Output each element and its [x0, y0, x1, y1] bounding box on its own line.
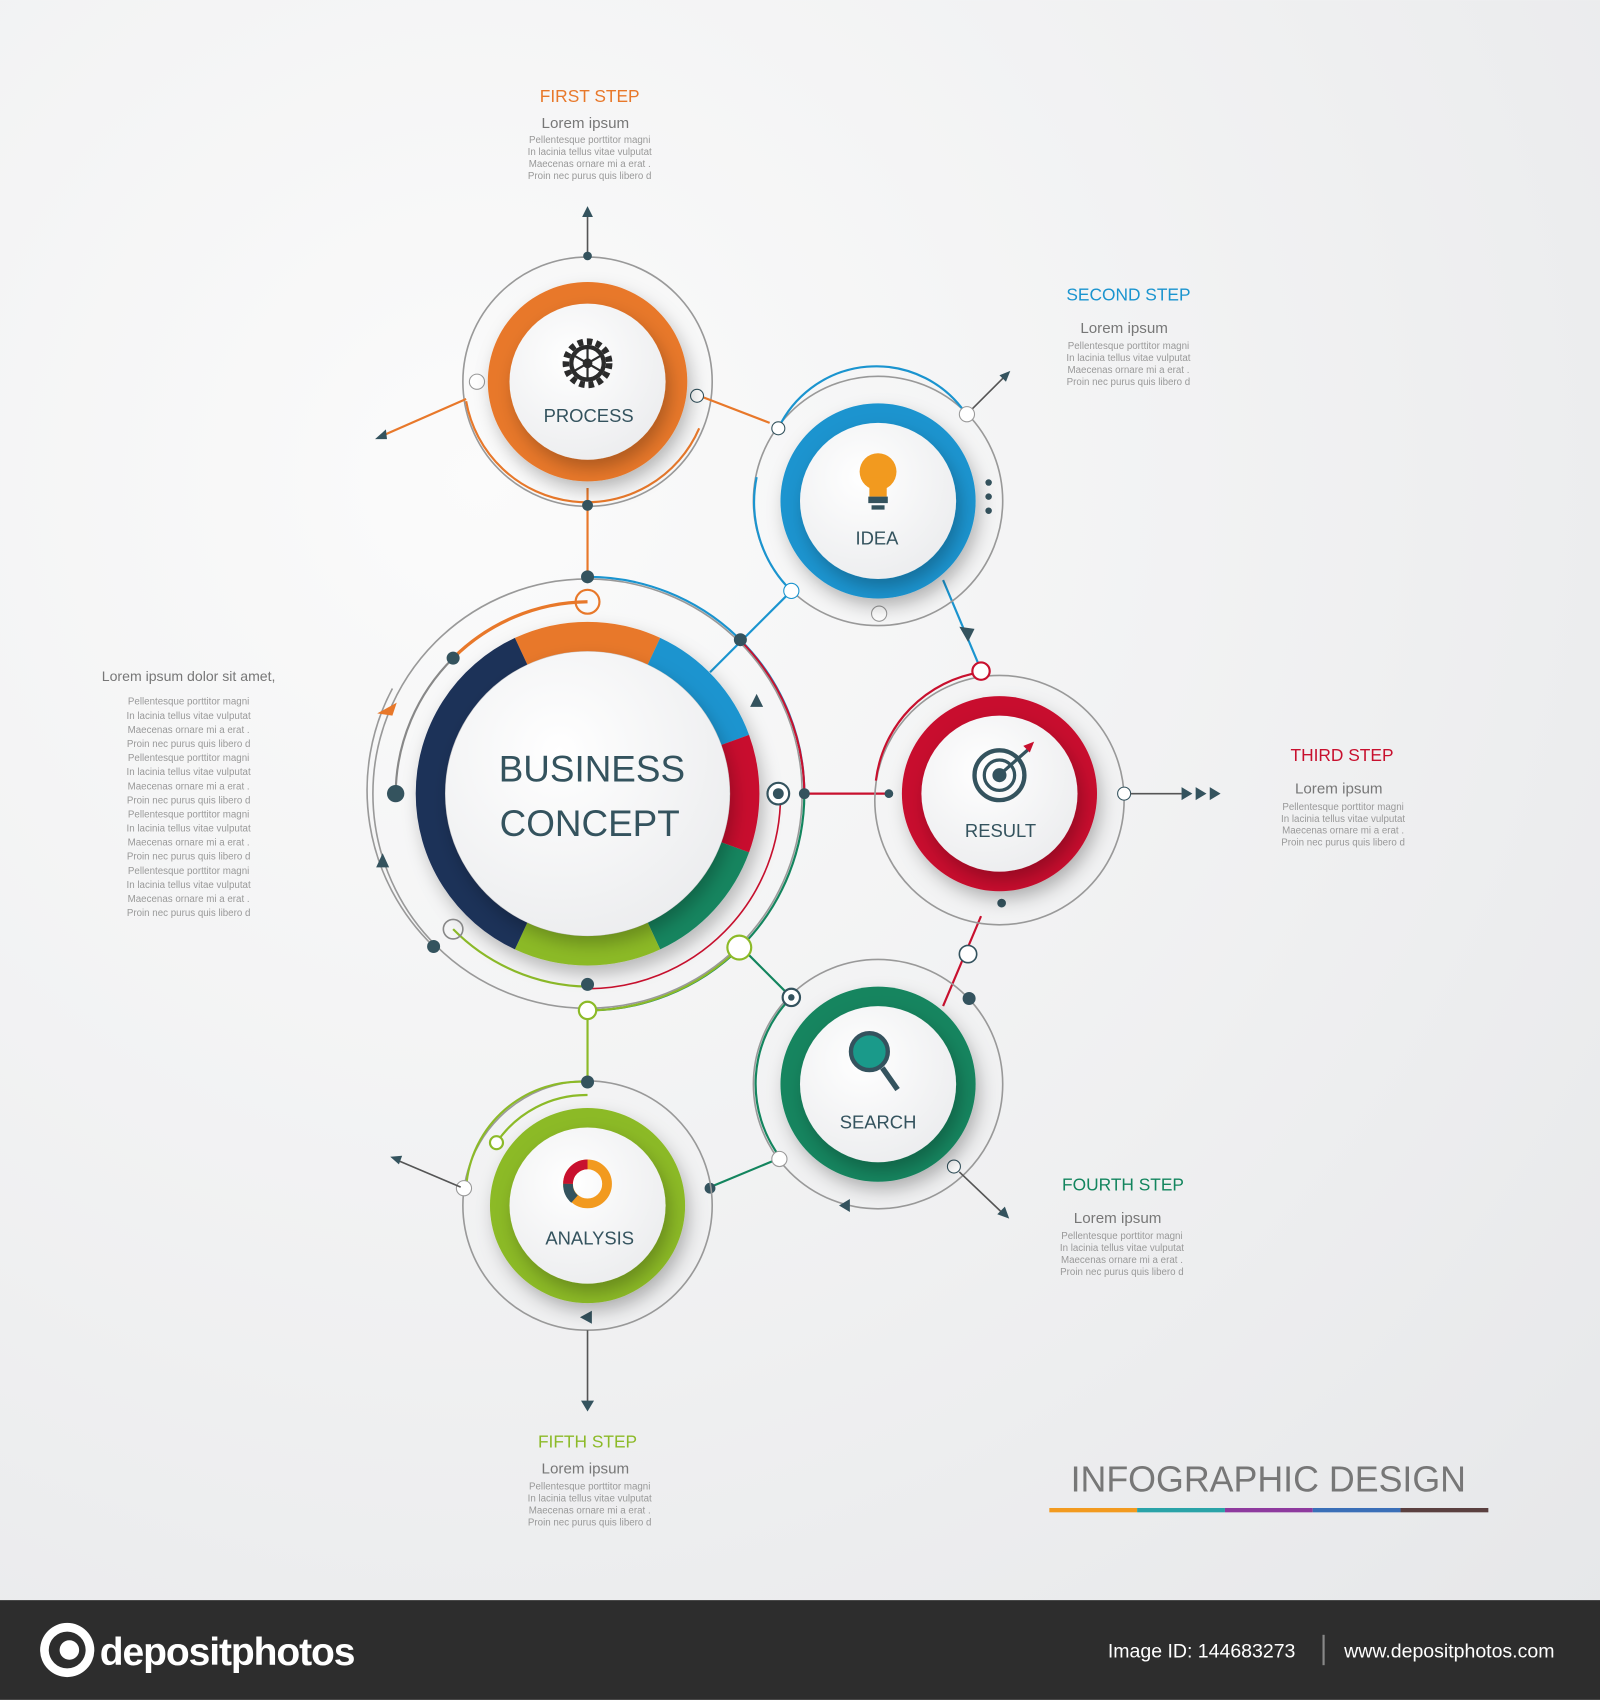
- text: left description: In lacinia tellus vitae vulputat: [127, 767, 251, 778]
- text: left description: Pellentesque porttitor magni: [128, 753, 249, 764]
- text: left description: Proin nec purus quis libero d: [127, 908, 250, 919]
- center: business concept: BUSINESS: [499, 749, 685, 790]
- text: third step: [1281, 745, 1405, 849]
- icon: magnifier: [851, 1033, 898, 1090]
- text: first step: Pellentesque porttitor magni: [529, 135, 650, 146]
- text: left description: Pellentesque porttitor magni: [128, 866, 249, 877]
- step 2: idea: [753, 366, 1010, 626]
- step 2: idea: IDEA: [855, 527, 899, 548]
- icon: bulb: [860, 453, 896, 510]
- text: second step: Lorem ipsum: [1080, 320, 1168, 337]
- text: second step: In lacinia tellus vitae vulputat: [1066, 353, 1191, 364]
- text: fifth step: FIFTH STEP: [538, 1431, 637, 1451]
- step 4: search: [705, 945, 1009, 1219]
- text: left description: Proin nec purus quis libero d: [127, 852, 250, 863]
- text: third step: Proin nec purus quis libero d: [1281, 838, 1405, 849]
- title: infographic design: [1049, 1460, 1488, 1512]
- text: first step: Maecenas ornare mi a erat .: [529, 159, 651, 170]
- step 4: search: SEARCH: [840, 1112, 916, 1133]
- step 3: result: RESULT: [965, 820, 1036, 841]
- text: left description: Maecenas ornare mi a erat .: [128, 781, 250, 792]
- text: third step: In lacinia tellus vitae vulputat: [1281, 814, 1405, 825]
- text: fifth step: Lorem ipsum: [542, 1460, 629, 1477]
- text: fourth step: [1060, 1174, 1184, 1278]
- text: third step: Pellentesque porttitor magni: [1282, 802, 1404, 813]
- text: fourth step: In lacinia tellus vitae vulputat: [1060, 1243, 1184, 1254]
- text: fourth step: FOURTH STEP: [1062, 1174, 1184, 1194]
- footer bar: Image ID: 144683273: [1108, 1641, 1295, 1663]
- text: left description: In lacinia tellus vitae vulputat: [127, 711, 251, 722]
- text: fifth step: In lacinia tellus vitae vulputat: [528, 1493, 652, 1504]
- footer bar: depositphotos: [100, 1631, 355, 1674]
- text: fifth step: [528, 1431, 652, 1528]
- text: first step: FIRST STEP: [540, 86, 640, 106]
- text: left description: Pellentesque porttitor magni: [128, 809, 249, 820]
- step 5: analysis: ANALYSIS: [545, 1228, 634, 1249]
- text: left description: Maecenas ornare mi a erat .: [128, 725, 250, 736]
- text: left description: Proin nec purus quis libero d: [127, 739, 250, 750]
- text: left description: In lacinia tellus vitae vulputat: [127, 880, 251, 891]
- text: third step: THIRD STEP: [1290, 745, 1394, 765]
- text: second step: [1066, 284, 1191, 388]
- text: third step: Lorem ipsum: [1295, 781, 1383, 798]
- text: second step: SECOND STEP: [1066, 284, 1191, 304]
- text: fourth step: Proin nec purus quis libero d: [1060, 1267, 1184, 1278]
- center: business concept: CONCEPT: [500, 803, 680, 844]
- text: fifth step: Pellentesque porttitor magni: [529, 1482, 650, 1493]
- connector lines: [367, 488, 981, 1187]
- step 3: result: [875, 627, 1221, 925]
- text: fourth step: Lorem ipsum: [1074, 1210, 1161, 1227]
- text: fourth step: Maecenas ornare mi a erat .: [1061, 1255, 1183, 1266]
- step 1: process: PROCESS: [544, 405, 634, 426]
- title: infographic design: INFOGRAPHIC DESIGN: [1071, 1460, 1466, 1500]
- icon: target: [975, 742, 1034, 800]
- text: first step: Proin nec purus quis libero d: [528, 171, 651, 182]
- footer bar: [0, 1600, 1600, 1700]
- step 1: process: [375, 206, 770, 511]
- icon: gear: [566, 342, 609, 385]
- step 5: analysis: [390, 1075, 712, 1412]
- text: left description: [102, 668, 275, 919]
- text: first step: Lorem ipsum: [542, 115, 629, 132]
- text: left description: In lacinia tellus vitae vulputat: [127, 824, 251, 835]
- text: third step: Maecenas ornare mi a erat .: [1282, 826, 1404, 837]
- text: left description: Proin nec purus quis libero d: [127, 795, 250, 806]
- icon: donut chart: [568, 1164, 607, 1203]
- text: second step: Maecenas ornare mi a erat .: [1067, 365, 1189, 376]
- text: fifth step: Proin nec purus quis libero d: [528, 1517, 651, 1528]
- text: first step: [528, 86, 652, 182]
- text: fourth step: Pellentesque porttitor magni: [1061, 1231, 1183, 1242]
- text: second step: Proin nec purus quis libero d: [1067, 377, 1190, 388]
- center: business concept: [373, 570, 810, 1019]
- text: left description: Lorem ipsum dolor sit amet,: [102, 668, 275, 684]
- footer bar: www.depositphotos.com: [1343, 1641, 1554, 1663]
- text: second step: Pellentesque porttitor magni: [1068, 341, 1189, 352]
- text: fifth step: Maecenas ornare mi a erat .: [529, 1505, 651, 1516]
- text: left description: Maecenas ornare mi a erat .: [128, 838, 250, 849]
- text: left description: Maecenas ornare mi a erat .: [128, 894, 250, 905]
- text: left description: Pellentesque porttitor magni: [128, 697, 249, 708]
- text: first step: In lacinia tellus vitae vulputat: [528, 147, 652, 158]
